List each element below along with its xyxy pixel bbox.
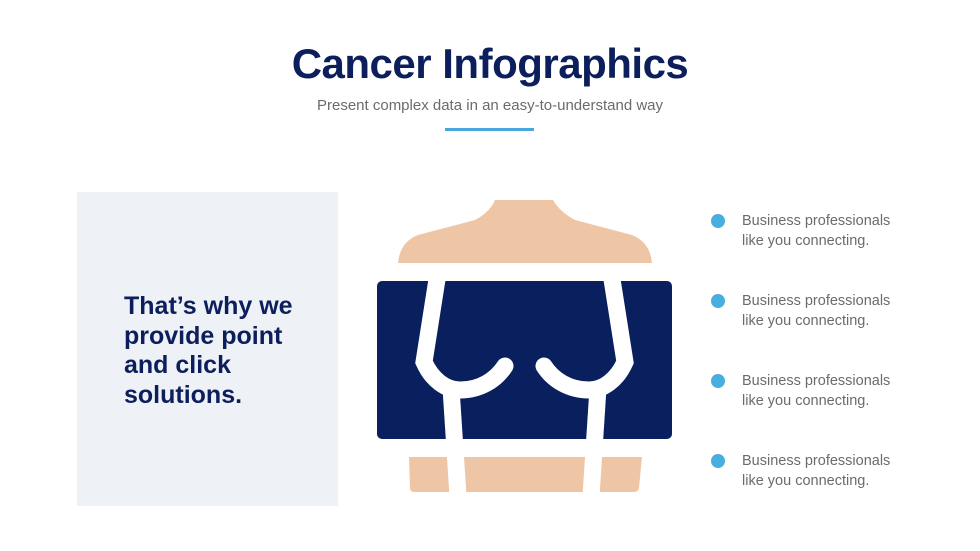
heading text <box>124 292 293 408</box>
heading text: solutions. <box>124 380 242 408</box>
heading text: That’s why we <box>124 292 293 320</box>
text: like you connecting. <box>742 233 869 249</box>
title: Cancer Infographics <box>292 40 688 87</box>
bullet 3 <box>711 373 890 409</box>
subtitle: Present complex data in an easy-to-understand way <box>317 97 663 114</box>
text: Business professionals <box>742 453 890 469</box>
text: Business professionals <box>742 373 890 389</box>
bullet 2 <box>711 293 890 329</box>
heading text: provide point <box>124 322 282 350</box>
panel: left text box <box>77 192 338 506</box>
text: like you connecting. <box>742 393 869 409</box>
heading text: and click <box>124 351 231 379</box>
bullet 4 <box>711 453 890 489</box>
text: Business professionals <box>742 213 890 229</box>
text: like you connecting. <box>742 313 869 329</box>
text: like you connecting. <box>742 473 869 489</box>
bullet 1 <box>711 213 890 249</box>
underline accent <box>445 128 534 131</box>
text: Business professionals <box>742 293 890 309</box>
